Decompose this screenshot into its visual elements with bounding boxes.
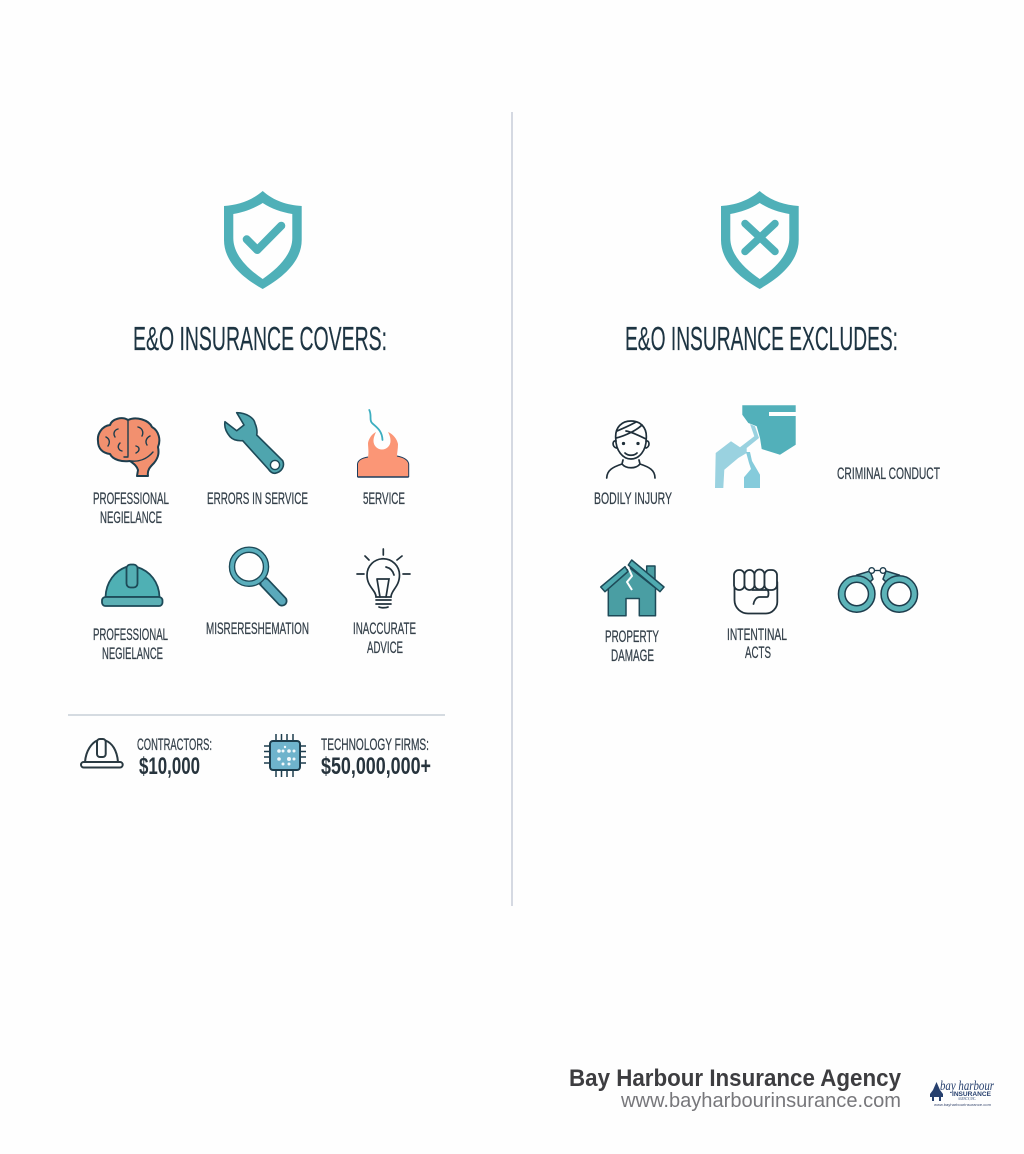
- website: www.bayharbourinsurance.com: [620, 1090, 901, 1112]
- stat: technology firms: [264, 734, 431, 780]
- icon: brain: [98, 418, 159, 476]
- icon: hard hat: [102, 564, 162, 606]
- icon: shield with x: [721, 191, 799, 289]
- label: PROPERTY: [605, 628, 659, 646]
- label: PROFESSIONAL: [93, 626, 168, 644]
- value: $50,000,000+: [321, 753, 431, 780]
- label line 2: ACTS: [745, 644, 771, 662]
- value: $10,000: [139, 753, 200, 780]
- icon: bandaged head: [607, 421, 655, 478]
- icon: light bulb: [357, 549, 410, 608]
- icon: wrench: [225, 413, 283, 473]
- icon: orange tag: [358, 410, 409, 477]
- icon: fist: [734, 570, 777, 614]
- heading: covers: E&O INSURANCE COVERS:: [133, 320, 387, 357]
- icon: magnifier: [232, 550, 282, 601]
- label: PROFESSIONAL: [93, 490, 169, 508]
- item: professional negligence brain: [93, 418, 169, 527]
- icon: chip: [264, 734, 306, 777]
- logo insurance: INSURANCE: [952, 1092, 991, 1098]
- label: criminal conduct: CRIMINAL CONDUCT: [837, 465, 940, 483]
- label: BODILY INJURY: [594, 490, 672, 508]
- icon: broken shield: [715, 405, 796, 488]
- logo: [930, 1079, 994, 1107]
- item: bodily injury: [594, 421, 672, 508]
- icon: hard hat outline: [81, 739, 123, 768]
- stat: contractors: [81, 736, 212, 780]
- panel: excludes: [594, 191, 940, 665]
- logo url: www.bayharbourinsurance.com: [934, 1103, 991, 1107]
- label line 2: NEGIELANCE: [102, 645, 163, 663]
- logo script: bay harbour: [940, 1079, 994, 1094]
- panel: covers: [68, 191, 445, 780]
- footer: agency name and url: [569, 1065, 902, 1112]
- label: INACCURATE: [353, 620, 416, 638]
- label: INTENTINAL: [727, 626, 787, 644]
- label line 2: DAMAGE: [611, 647, 654, 665]
- item: inaccurate advice: [353, 549, 416, 657]
- label line 2: ADVICE: [367, 639, 403, 657]
- label: CONTRACTORS:: [137, 736, 212, 754]
- label: ERRORS IN SERVICE: [207, 490, 308, 508]
- label line 2: NEGIELANCE: [100, 509, 162, 527]
- item: intentional acts: [727, 570, 787, 662]
- logo building: [930, 1082, 943, 1101]
- item: property damage: [601, 560, 664, 665]
- item: hard hat: [93, 564, 168, 663]
- icon: shield with check: [224, 191, 302, 289]
- icon: handcuffs: [842, 568, 914, 609]
- label: TECHNOLOGY FIRMS:: [321, 736, 429, 754]
- item: errors in service: [207, 413, 308, 508]
- item: misrepresentation: [206, 550, 309, 638]
- agency name: Bay Harbour Insurance Agency: [569, 1065, 902, 1092]
- icon: damaged house: [601, 560, 664, 616]
- logo agency: AGENCY, INC.: [958, 1096, 976, 1102]
- label: 5ERVICE: [363, 490, 405, 508]
- label: MISRERESHEMATION: [206, 620, 309, 638]
- item: service: [358, 410, 409, 508]
